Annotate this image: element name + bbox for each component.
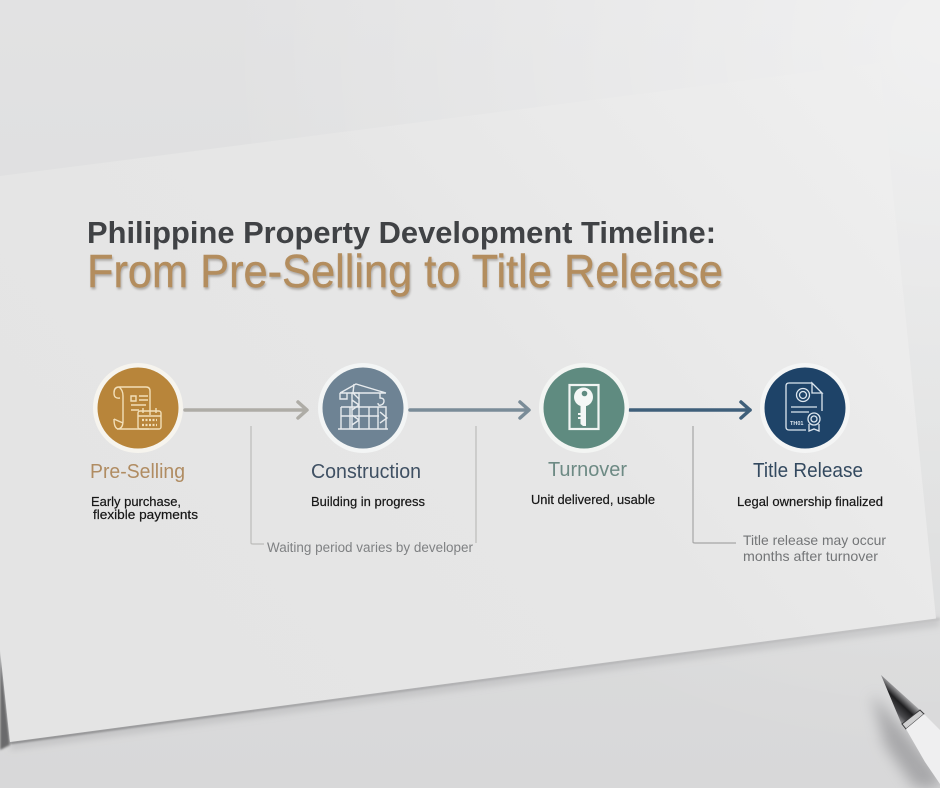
pen shadow — [872, 694, 940, 788]
description: Turnover: Unit delivered, usable — [531, 492, 655, 507]
bracket: title release timing — [693, 426, 736, 543]
callout: title release timing — [693, 426, 886, 564]
heading: subtitle: From Pre-Selling to Title Release — [87, 245, 723, 297]
icon circle: construction — [318, 363, 408, 453]
arrow: construction to turnover — [410, 402, 529, 418]
icon circle: pre-selling — [93, 363, 183, 453]
arrow: turnover to title release — [630, 402, 750, 418]
arrow: pre-selling to construction — [185, 402, 307, 418]
description: Title Release: Legal ownership finalized — [737, 494, 883, 509]
label: Construction: Construction — [311, 461, 421, 483]
icon: title document — [786, 383, 822, 431]
icon: pen — [881, 675, 940, 784]
label: Turnover: Turnover — [548, 459, 627, 481]
note: title release timing: months after turnover — [743, 548, 878, 564]
description: Construction: Building in progress — [311, 494, 425, 509]
note: title release timing: Title release may occur — [743, 532, 886, 548]
step: Pre-Selling — [90, 363, 199, 522]
icon: scroll and calendar — [114, 387, 161, 429]
note: waiting period: Waiting period varies by developer — [267, 540, 474, 555]
heading: main title: Philippine Property Development Timeline: — [87, 215, 716, 250]
step: Turnover — [531, 363, 655, 507]
label: Pre-Selling: Pre-Selling — [90, 461, 185, 483]
icon circle: turnover — [539, 363, 629, 453]
icon circle: title release — [760, 363, 850, 453]
paper shadow — [0, 619, 940, 750]
bracket: waiting period — [251, 426, 476, 544]
description: Pre-Selling: flexible payments — [93, 507, 199, 522]
callout: waiting period — [251, 426, 476, 555]
icon: key in frame — [570, 385, 598, 429]
label: Title Release: Title Release — [753, 460, 863, 482]
icon text: document stamp: TH01 — [790, 421, 803, 427]
icon: crane and scaffold — [338, 384, 388, 429]
step: Title Release — [737, 363, 883, 509]
description: Pre-Selling: Early purchase, — [91, 494, 181, 509]
step: Construction — [311, 363, 425, 509]
title — [87, 215, 723, 297]
